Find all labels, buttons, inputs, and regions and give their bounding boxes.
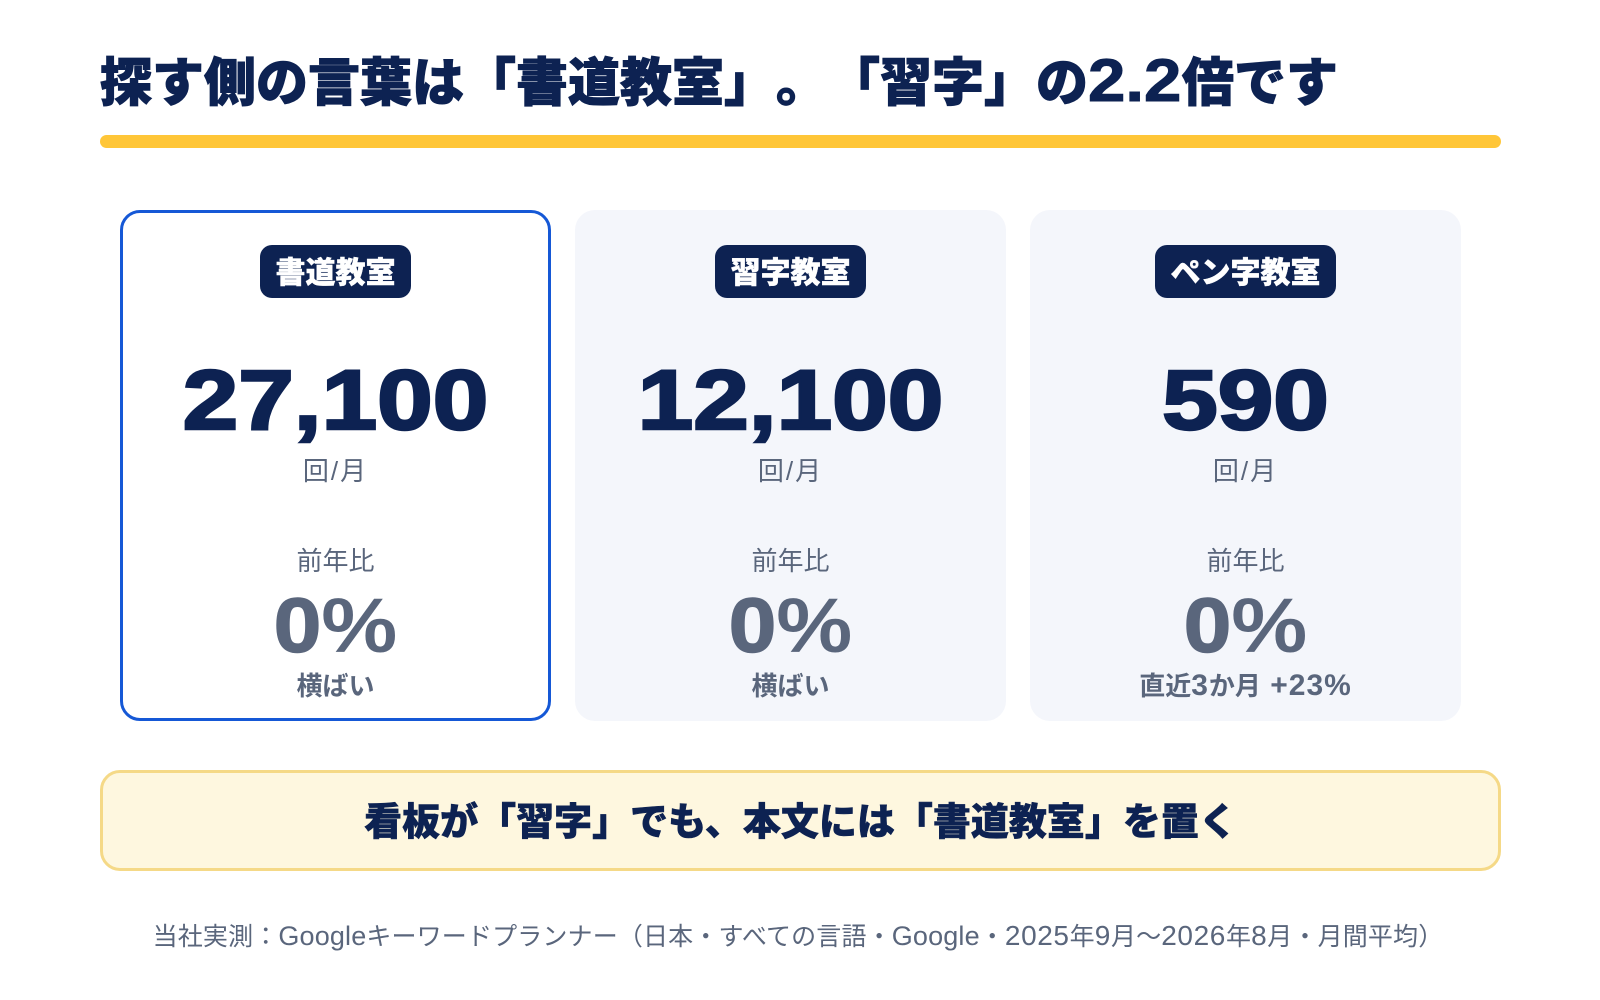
year over year value: 0% bbox=[274, 583, 397, 669]
year over year label: 前年比 bbox=[1206, 546, 1284, 576]
callout: 看板が「習字」でも、本文には「書道教室」を置く bbox=[364, 802, 1237, 844]
trend note: 直近3か月 +23% bbox=[1139, 669, 1352, 702]
source note: 当社実測：Googleキーワードプランナー（日本・すべての言語・Google・2025年9月～2026年8月・月間平均） bbox=[153, 920, 1443, 951]
label: 習字教室 bbox=[715, 245, 866, 298]
value: 590: 590 bbox=[1162, 353, 1329, 447]
value: 12,100: 12,100 bbox=[638, 353, 943, 447]
trend note: 横ばい bbox=[296, 671, 374, 701]
label: 書道教室 bbox=[260, 245, 411, 298]
unit: 回/月 bbox=[758, 456, 823, 486]
callout bbox=[100, 770, 1501, 871]
year over year value: 0% bbox=[1184, 583, 1307, 669]
year over year value: 0% bbox=[729, 583, 852, 669]
label: ペン字教室 bbox=[1155, 245, 1336, 298]
title: 2.2 bbox=[1088, 47, 1181, 114]
label: ペン字教室: ペン字教室 bbox=[1170, 257, 1320, 290]
year over year label: 前年比 bbox=[296, 546, 374, 576]
title: 探す側の言葉は「書道教室」。「習字」の 倍です bbox=[100, 55, 1338, 113]
trend note: 横ばい bbox=[751, 671, 830, 701]
unit: 回/月 bbox=[1213, 456, 1278, 486]
label: 書道教室: 書道教室 bbox=[276, 257, 396, 290]
label: 習字教室: 習字教室 bbox=[730, 257, 850, 290]
year over year label: 前年比 bbox=[751, 546, 830, 576]
title underline bbox=[100, 135, 1501, 148]
value: 27,100: 27,100 bbox=[183, 353, 488, 447]
panel: ペン字教室 bbox=[1030, 210, 1461, 721]
panel: 書道教室 bbox=[120, 210, 551, 721]
unit: 回/月 bbox=[303, 456, 368, 486]
panel: 習字教室 bbox=[575, 210, 1006, 721]
